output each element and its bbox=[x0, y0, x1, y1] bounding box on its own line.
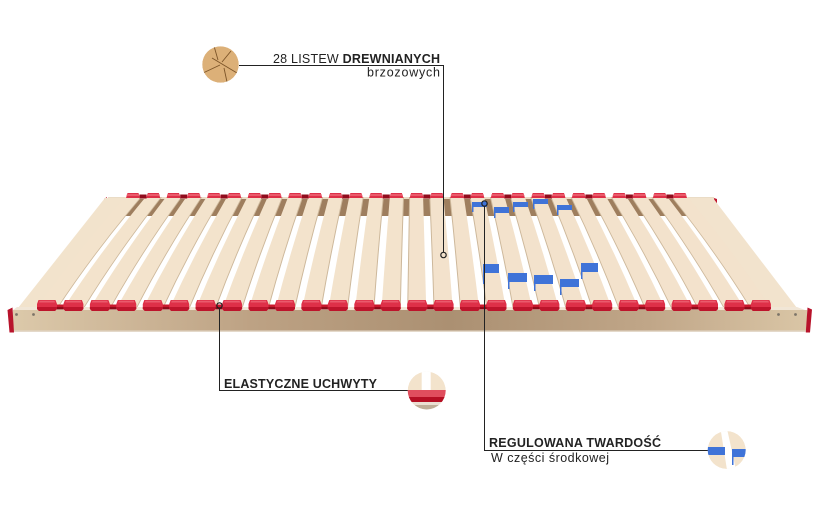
outer left board bbox=[18, 198, 126, 308]
callout: wood slats bbox=[202, 46, 446, 258]
front red end caps bbox=[8, 308, 812, 332]
callout: elastic holders bbox=[217, 303, 448, 411]
icon: wood cross-section bbox=[202, 46, 239, 83]
marker dot bbox=[217, 303, 222, 308]
label: brzozowych: brzozowych bbox=[367, 66, 440, 80]
front rail bbox=[13, 310, 807, 332]
blue firmness sliders bbox=[472, 199, 598, 295]
marker dot bbox=[441, 252, 446, 258]
label: elastyczne uchwyty: ELASTYCZNE UCHWYTY bbox=[224, 377, 378, 391]
rail screws bbox=[15, 313, 797, 316]
label: regulowana twardość: REGULOWANA TWARDOŚĆ bbox=[489, 435, 661, 450]
rear red end caps bbox=[104, 197, 717, 208]
outer right board bbox=[686, 198, 797, 308]
label: 28 listew: 28 LISTEW DREWNIANYCH bbox=[273, 52, 440, 66]
front red clips bbox=[37, 300, 771, 311]
bed frame with slats bbox=[8, 193, 812, 332]
connector line bbox=[484, 206, 708, 450]
slats bbox=[37, 197, 771, 308]
marker dot bbox=[482, 201, 487, 206]
connector line bbox=[220, 308, 408, 390]
icon: holder detail bbox=[408, 372, 446, 410]
label: w części środkowej: W części środkowej bbox=[491, 451, 609, 465]
front rail top lip bbox=[13, 307, 805, 310]
rear red clips bbox=[126, 193, 687, 198]
callout: adjustable firmness bbox=[482, 201, 747, 470]
connector line bbox=[239, 66, 444, 252]
rear rail bbox=[108, 197, 714, 216]
icon: blue slider detail bbox=[707, 430, 747, 470]
